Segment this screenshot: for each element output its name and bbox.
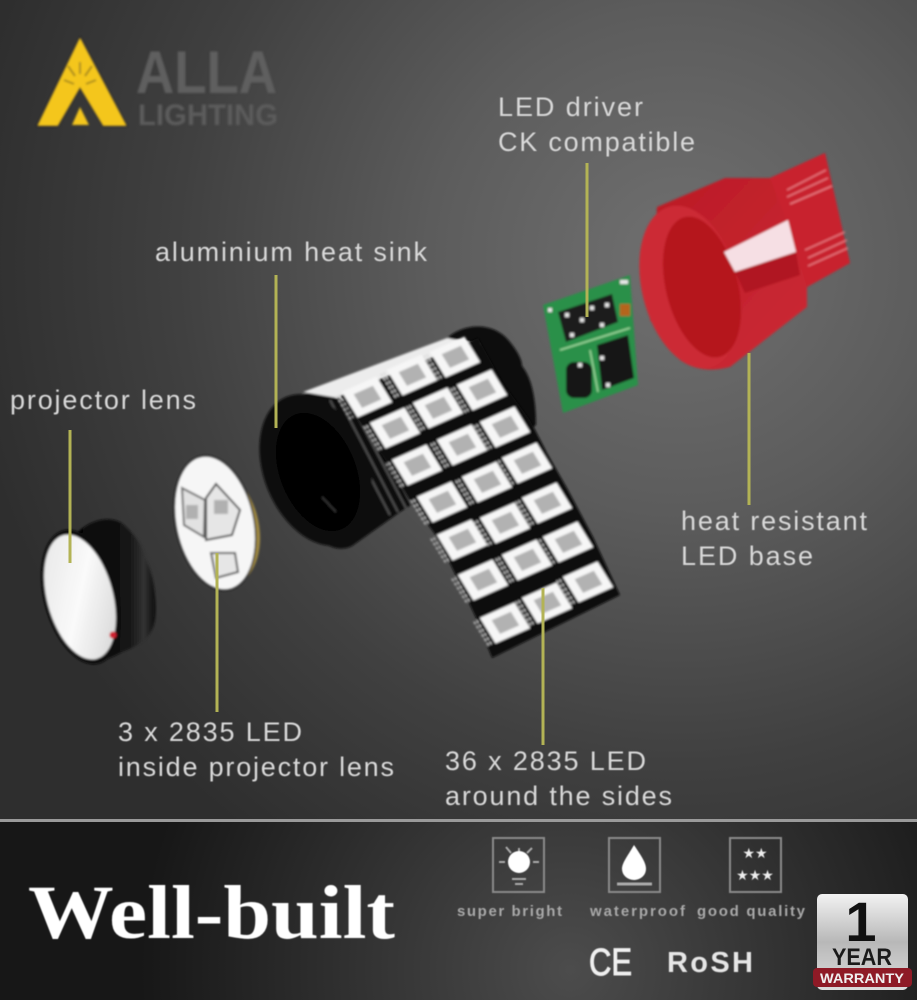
label: heat resistant LED base: LED base (681, 541, 813, 571)
label: heat resistant LED base: heat resistant (681, 506, 867, 536)
RoSH mark: RoSH (667, 947, 753, 979)
label: projector lens: projector lens (10, 385, 196, 415)
aluminium heat sink cylinder (238, 326, 536, 563)
CE mark: CE (589, 942, 632, 984)
label: aluminium heat sink: aluminium heat sink (155, 237, 428, 267)
LED driver circuit board (543, 275, 638, 413)
icon: yellow triangle logo (37, 37, 127, 126)
caption: good quality: good quality (697, 903, 806, 920)
label: LED driver CK compatible: LED driver (498, 92, 643, 122)
label: 36 x 2835 LED around the sides (445, 746, 672, 811)
badge: 1 year warranty (813, 890, 912, 990)
projector lens (27, 519, 156, 673)
caption: super bright: super bright (457, 903, 562, 920)
LED disc with 3 LEDs (163, 448, 270, 598)
icon: good quality: ★★★ (736, 868, 774, 884)
icon: waterproof (609, 838, 660, 892)
label: heat resistant LED base (681, 506, 867, 571)
label: 3 x 2835 LED inside projector lens (118, 717, 394, 782)
logo wordmark: ALLA: ALLA (136, 39, 277, 106)
icon: super bright (493, 838, 544, 892)
icon: good quality: ★★ (742, 846, 768, 862)
label: 36 x 2835 LED around the sides: around the sides (445, 781, 672, 811)
heading: Well-built: Well-built (28, 871, 395, 955)
badge: 1 year warranty: YEAR (832, 944, 892, 971)
badge: 1 year warranty: WARRANTY (820, 970, 905, 986)
heat resistant red LED base (623, 153, 850, 379)
logo: Alla Lighting (37, 37, 278, 132)
label: LED driver CK compatible: CK compatible (498, 127, 695, 157)
badge: 1 year warranty: 1 (845, 890, 877, 953)
footer panel (0, 819, 917, 1000)
label: 36 x 2835 LED around the sides: 36 x 2835 LED (445, 746, 646, 776)
logo wordmark: LIGHTING: LIGHTING (138, 99, 278, 132)
leader lines (70, 163, 749, 745)
caption: waterproof: waterproof (589, 903, 686, 920)
LED strip with 36 x 2835 LEDs (335, 337, 620, 658)
icon: good quality (730, 838, 781, 892)
label: 3 x 2835 LED inside projector lens: 3 x 2835 LED (118, 717, 302, 747)
label: 3 x 2835 LED inside projector lens: inside projector lens (118, 752, 394, 782)
label: LED driver CK compatible (498, 92, 695, 157)
